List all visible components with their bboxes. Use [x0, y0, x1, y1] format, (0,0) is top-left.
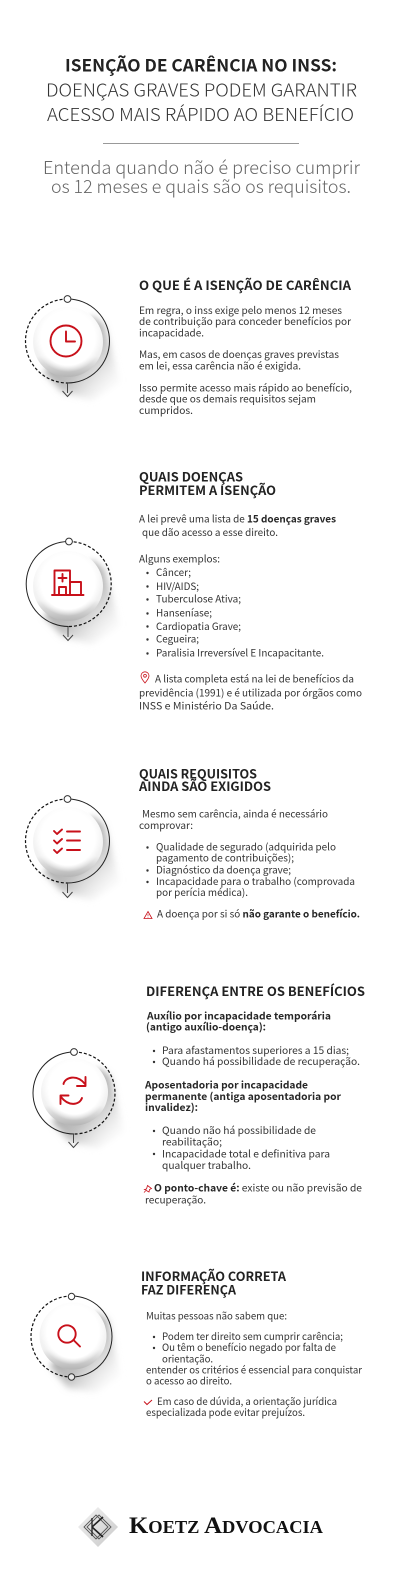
- panel: informação correta: [31, 1266, 362, 1419]
- bullet list: Diagnóstico da doença grave;: [156, 861, 291, 876]
- text block: aposentadoria: reabilitação;: [162, 1134, 222, 1149]
- heading: DIFERENÇA ENTRE OS BENEFÍCIOS: [146, 981, 365, 1000]
- heading: FAZ DIFERENÇA: [141, 1279, 237, 1298]
- text block: Ou têm o benefício negado por falta de: [162, 1339, 336, 1354]
- text block: aposentadoria: qualquer trabalho.: [162, 1157, 251, 1172]
- text block: Isso permite acesso mais rápido ao benefício,: [139, 380, 352, 395]
- text block: A lei prevê uma lista de 15 doenças graves: [139, 511, 336, 526]
- text block: aposentadoria: Quando não há possibilidade de: [162, 1122, 316, 1137]
- icon: refresh badge: [33, 1049, 124, 1148]
- bullet list: HIV/AIDS;: [156, 578, 199, 593]
- text block: desde que os demais requisitos sejam: [139, 391, 316, 406]
- icon: check mark: [144, 1400, 152, 1404]
- text block: Mas, em casos de doenças graves previstas: [139, 346, 339, 361]
- key point: O ponto-chave é: existe ou não previsão de: [154, 1180, 362, 1195]
- icon: clock badge: [26, 296, 120, 400]
- bullet list: [146, 839, 355, 899]
- text block: aposentadoria: Incapacidade total e definitiva para: [162, 1145, 330, 1160]
- note: A lista completa está na lei de benefícios da: [155, 671, 354, 686]
- text block: em lei, essa carência não é exigida.: [139, 358, 301, 372]
- text block: auxílio: [146, 1007, 360, 1068]
- icon: magnifier badge: [31, 1293, 120, 1392]
- bullet list: Paralisia Irreversível E Incapacitante.: [156, 645, 324, 660]
- key point: [145, 1180, 362, 1206]
- title: DOENÇAS GRAVES PODEM GARANTIR: [46, 78, 357, 103]
- heading: INFORMAÇÃO CORRETA: [141, 1266, 287, 1285]
- heading: O QUE É A ISENÇÃO DE CARÊNCIA: [139, 275, 352, 294]
- key point: recuperação.: [145, 1191, 206, 1206]
- text block: Em regra, o inss exige pelo menos 12 meses: [139, 302, 342, 317]
- subtitle: [43, 154, 361, 199]
- icon: location pin: [141, 672, 149, 683]
- icon: hospital badge: [26, 538, 120, 644]
- heading: QUAIS DOENÇAS: [139, 467, 243, 486]
- note: INSS e Ministério Da Saúde.: [139, 697, 274, 712]
- bullet list: Incapacidade para o trabalho (comprovada: [156, 873, 355, 888]
- closing note: Em caso de dúvida, a orientação jurídica: [157, 1393, 337, 1408]
- text block: aposentadoria: [144, 1076, 342, 1172]
- heading: QUAIS REQUISITOS: [139, 763, 257, 782]
- text block: o acesso ao direito.: [146, 1372, 232, 1387]
- text block: [139, 511, 336, 566]
- bullet list: Cegueira;: [156, 631, 199, 646]
- text block: aposentadoria: Aposentadoria por incapacidade: [144, 1076, 308, 1091]
- bullet list: Tuberculose Ativa;: [156, 591, 241, 606]
- closing note: especializada pode evitar prejuízos.: [146, 1404, 305, 1419]
- bullet list: Qualidade de segurado (adquirida pelo: [156, 839, 336, 854]
- bullet list: Hanseníase;: [156, 605, 212, 620]
- bullet list: Câncer;: [156, 564, 191, 579]
- note: [139, 671, 362, 712]
- text block: auxílio: Auxílio por incapacidade temporária: [146, 1007, 331, 1022]
- heading: AINDA SÃO EXIGIDOS: [138, 776, 271, 795]
- panel: o que é a isenção de carência: [26, 275, 352, 417]
- title: ACESSO MAIS RÁPIDO AO BENEFÍCIO: [47, 102, 354, 127]
- icon: checklist badge: [26, 796, 120, 900]
- text block: Podem ter direito sem cumprir carência;: [162, 1328, 343, 1343]
- text block: de contribuição para conceder benefícios por: [139, 313, 351, 328]
- text block: entender os critérios é essencial para conquistar: [146, 1361, 362, 1376]
- panel: quais doenças: [26, 467, 362, 712]
- text block: Muitas pessoas não sabem que:: [146, 1307, 287, 1322]
- text block: Mesmo sem carência, ainda é necessário: [142, 806, 328, 821]
- icon: warning: [144, 912, 152, 918]
- bullet list: pagamento de contribuições);: [156, 850, 294, 865]
- text block: cumpridos.: [139, 402, 193, 417]
- text block: orientação.: [162, 1350, 213, 1365]
- icon: logo diamond: [78, 1507, 118, 1547]
- text block: [139, 806, 328, 832]
- title: [46, 52, 357, 127]
- logo: Koetz Advocacia: [78, 1507, 323, 1547]
- text block: aposentadoria: permanente (antiga aposentadoria por: [145, 1088, 342, 1103]
- text block: comprovar:: [139, 817, 193, 832]
- heading: [138, 763, 271, 795]
- bullet list: por perícia médica).: [156, 884, 248, 899]
- wordmark: KOETZ ADVOCACIA: [129, 1513, 323, 1539]
- text block: [146, 1307, 362, 1387]
- text block: auxílio: Quando há possibilidade de recuperação.: [162, 1053, 360, 1068]
- text block: que dão acesso a esse direito.: [142, 524, 278, 539]
- panel: quais requisitos: [26, 763, 360, 921]
- bullet list: [146, 564, 324, 660]
- subtitle: Entenda quando não é preciso cumprir: [43, 154, 361, 180]
- note: previdência (1991) e é utilizada por órgãos como: [139, 685, 362, 700]
- text block: auxílio: (antigo auxílio-doença):: [146, 1019, 266, 1034]
- text block: auxílio: Para afastamentos superiores a 15 dias;: [162, 1042, 349, 1057]
- heading: [139, 467, 276, 499]
- title: ISENÇÃO DE CARÊNCIA NO INSS:: [65, 52, 337, 76]
- closing note: [146, 1393, 337, 1419]
- heading: PERMITEM A ISENÇÃO: [139, 480, 276, 499]
- text block: Alguns exemplos:: [139, 551, 220, 566]
- panel: diferença entre os benefícios: [33, 981, 365, 1206]
- subtitle: os 12 meses e quais são os requisitos.: [51, 173, 351, 199]
- heading: [141, 1266, 287, 1298]
- text block: [139, 302, 352, 417]
- warning note: A doença por si só não garante o benefício.: [157, 906, 360, 921]
- text block: incapacidade.: [139, 325, 204, 340]
- icon: pushpin: [144, 1186, 152, 1192]
- bullet list: Cardiopatia Grave;: [156, 618, 241, 633]
- text block: aposentadoria: invalidez):: [145, 1099, 198, 1114]
